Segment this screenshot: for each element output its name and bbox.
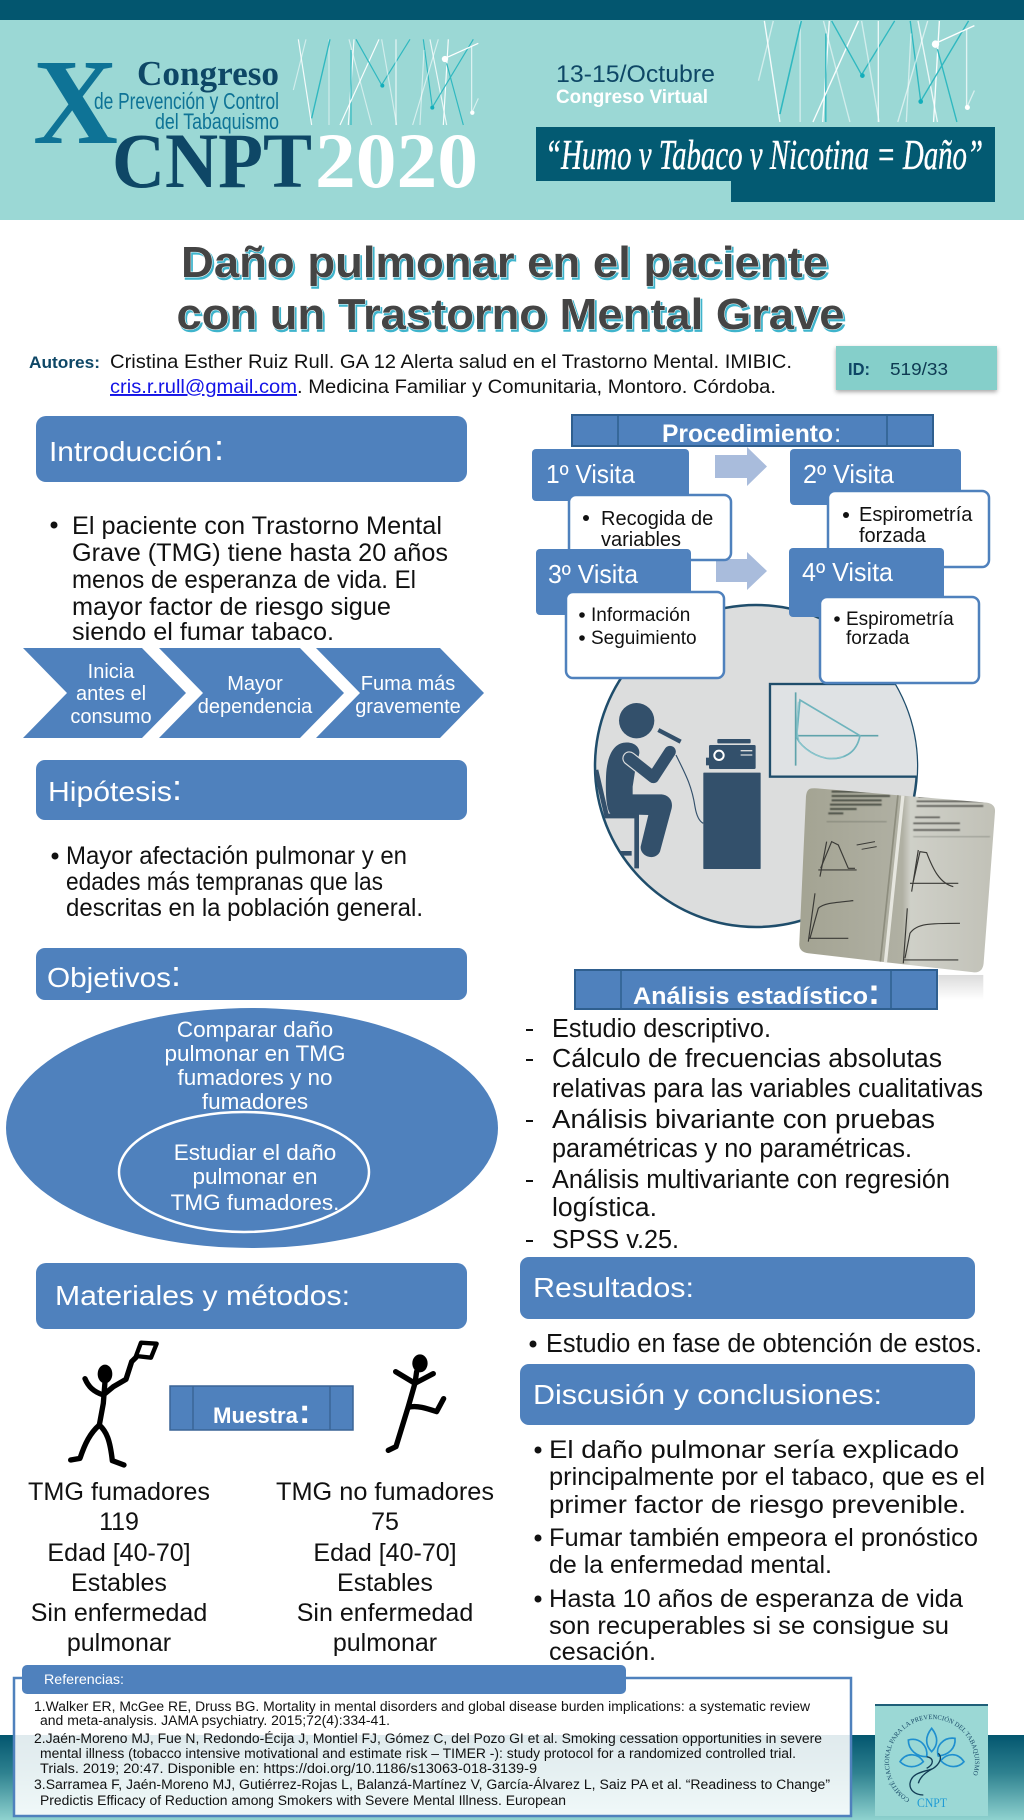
smokers group text: Estables bbox=[71, 1569, 167, 1597]
step: 3º visita: 3º Visita bbox=[548, 559, 639, 589]
ID tag: 519/33 bbox=[890, 359, 948, 379]
step: 1º visita: Recogida de bbox=[601, 508, 713, 530]
smokers group text: 119 bbox=[99, 1508, 139, 1536]
panel: objetivos bbox=[6, 948, 498, 1248]
chevron process bbox=[23, 648, 484, 738]
chevron: mayor dependencia: Mayor bbox=[227, 673, 283, 695]
non smokers group text: pulmonar bbox=[333, 1629, 437, 1657]
panel: muestra: Muestra bbox=[213, 1403, 299, 1428]
references text: 1.Walker ER, McGee RE, Druss BG. Mortality in mental disorders and global disease burden implications: a systematic review bbox=[34, 1699, 810, 1714]
conclusions list: Fumar también empeora el pronóstico bbox=[549, 1524, 978, 1552]
panel: análisis estadístico header bbox=[575, 970, 937, 1012]
chevron: inicia antes bbox=[23, 648, 186, 738]
objectives ellipses: fumadores bbox=[202, 1089, 308, 1114]
icon: stick figure smoker bbox=[71, 1343, 157, 1465]
panel: resultados bbox=[520, 1257, 982, 1358]
panel: materiales y métodos bbox=[36, 1263, 467, 1329]
title: con un Trastorno Mental Grave bbox=[178, 292, 846, 341]
introduction text: siendo el fumar tabaco. bbox=[72, 618, 334, 646]
logo: CNPT committee: CNPT bbox=[917, 1795, 947, 1810]
panel: discusión y conclusiones: Discusión y conclusiones: bbox=[533, 1379, 882, 1410]
logo X Congreso CNPT 2020 bbox=[33, 35, 478, 204]
step: 3º visita: Seguimiento bbox=[591, 628, 697, 649]
panel: referencias bbox=[14, 1665, 851, 1816]
statistical analysis list bbox=[526, 1015, 983, 1254]
introduction text: Grave (TMG) tiene hasta 20 años bbox=[72, 539, 448, 567]
non smokers group text bbox=[276, 1478, 494, 1657]
panel: materiales y métodos: Materiales y métodos: bbox=[55, 1280, 350, 1311]
step: 3º visita: Información bbox=[591, 605, 690, 626]
panel: procedimiento header: Procedimiento bbox=[662, 420, 833, 448]
logo: CNPT committee: COMITÉ NACIONAL PARA LA PREVENCIÓN DEL TABAQUISMO bbox=[884, 1714, 980, 1802]
statistical analysis list: Análisis bivariante con pruebas bbox=[552, 1106, 935, 1134]
conclusions list: principalmente por el tabaco, que es el bbox=[549, 1463, 985, 1491]
icon: flower bbox=[900, 1728, 964, 1795]
smokers group text bbox=[28, 1478, 210, 1657]
logo X Congreso CNPT 2020: de Prevención y Control bbox=[94, 88, 279, 114]
panel: introducción bbox=[36, 416, 467, 646]
title: Daño pulmonar en el paciente bbox=[182, 240, 830, 289]
ID tag: ID: bbox=[848, 359, 870, 379]
logo X Congreso CNPT 2020: X bbox=[33, 35, 118, 170]
statistical analysis list: SPSS v.25. bbox=[552, 1226, 679, 1254]
step: 4º visita: Espirometría bbox=[846, 609, 954, 630]
panel: introducción: Introducción bbox=[49, 436, 212, 467]
congress dates bbox=[556, 61, 715, 108]
authors: Autores: bbox=[29, 354, 100, 372]
panel: referencias: Referencias: bbox=[44, 1671, 124, 1687]
authors: . Medicina Familiar y Comunitaria, Montoro. Córdoba. bbox=[297, 376, 776, 398]
step: 1º visita bbox=[532, 449, 731, 560]
conclusions list: El daño pulmonar sería explicado bbox=[549, 1436, 959, 1464]
objectives ellipses bbox=[6, 1008, 498, 1248]
conclusions list: son recuperables si se consigue su bbox=[549, 1612, 949, 1640]
congress dates: 13-15/Octubre bbox=[556, 61, 715, 88]
step: 2º visita: Espirometría bbox=[859, 504, 973, 526]
spirometry illustration circle bbox=[595, 605, 927, 927]
authors: cris.r.rull@gmail.com bbox=[110, 376, 297, 398]
smokers group text: TMG fumadores bbox=[28, 1478, 210, 1506]
authors bbox=[29, 351, 792, 398]
statistical analysis list: Cálculo de frecuencias absolutas bbox=[552, 1045, 942, 1073]
references text: 3.Sarramea F, Jaén-Moreno MJ, Gutiérrez-Rojas L, Balanzá-Martínez V, García-Álvarez L, Saiz PA et al. “Readiness to Change” bbox=[34, 1777, 830, 1792]
step: 1º visita: variables bbox=[601, 529, 681, 551]
smokers group text: Edad [40-70] bbox=[47, 1539, 191, 1567]
panel: objetivos: Objetivos bbox=[47, 962, 171, 993]
step: 4º visita bbox=[789, 548, 979, 683]
authors: Cristina Esther Ruiz Rull. GA 12 Alerta salud en el Trastorno Mental. IMIBIC. bbox=[110, 351, 792, 373]
title: Daño pulmonar en el paciente bbox=[181, 238, 828, 287]
congress dates: Congreso Virtual bbox=[556, 87, 708, 108]
references text: 2.Jaén-Moreno MJ, Fue N, Redondo-Écija J, Montiel FJ, Gómez C, del Pozo GI et al. Smoking cessation opportunities in severe bbox=[34, 1731, 822, 1746]
smokers group text: Sin enfermedad bbox=[31, 1599, 207, 1627]
hypothesis text bbox=[52, 842, 423, 922]
conclusions list: cesación. bbox=[549, 1638, 656, 1666]
photo: spirometry printout bbox=[797, 787, 1000, 1000]
line art decorations bbox=[293, 21, 974, 125]
statistical analysis list: paramétricas y no paramétricas. bbox=[552, 1135, 912, 1163]
panel: muestra: : bbox=[299, 1393, 310, 1431]
references text: and meta-analysis. JAMA psychiatry. 2015;72(4):334-41. bbox=[40, 1713, 390, 1728]
statistical analysis list: logística. bbox=[552, 1194, 657, 1222]
non smokers group text: 75 bbox=[371, 1508, 399, 1536]
objectives ellipses: pulmonar en bbox=[192, 1164, 318, 1189]
conclusions list: Hasta 10 años de esperanza de vida bbox=[549, 1585, 963, 1613]
step: 2º visita bbox=[790, 449, 989, 567]
conclusions list: primer factor de riesgo prevenible. bbox=[549, 1491, 966, 1519]
header banner bbox=[0, 0, 1024, 220]
chevron: fuma más: Fuma más bbox=[361, 673, 455, 695]
panel: hipótesis: : bbox=[172, 767, 182, 808]
step: 3º visita bbox=[536, 549, 724, 678]
icon: spirometer machine bbox=[703, 739, 761, 869]
panel: objetivos: : bbox=[171, 953, 181, 994]
arrow: visita 3 to 4 bbox=[716, 552, 767, 590]
logo X Congreso CNPT 2020: Congreso bbox=[137, 54, 279, 93]
panel: análisis estadístico header: Análisis estadístico bbox=[633, 983, 868, 1010]
objectives ellipses: fumadores y no bbox=[177, 1065, 333, 1090]
references text: Trials. 2019; 20:47. Disponible en: https://doi.org/10.1186/s13063-018-3139-9 bbox=[40, 1761, 537, 1776]
slogan banner bbox=[536, 127, 995, 202]
non smokers group text: Sin enfermedad bbox=[297, 1599, 473, 1627]
ID tag bbox=[836, 346, 997, 390]
chevron: fuma más bbox=[316, 648, 484, 738]
introduction text: menos de esperanza de vida. El bbox=[72, 566, 416, 594]
introduction text: El paciente con Trastorno Mental bbox=[72, 512, 442, 540]
statistical analysis list: Estudio descriptivo. bbox=[552, 1015, 771, 1043]
hypothesis text: Mayor afectación pulmonar y en bbox=[66, 842, 407, 870]
panel: discusión y conclusiones bbox=[520, 1364, 985, 1666]
references text: mental illness (tobacco intensive motivational and estimate risk – TIMER -): study protocol for a randomized controlled trial. bbox=[40, 1746, 796, 1761]
logo X Congreso CNPT 2020: CNPT bbox=[112, 117, 312, 204]
title: con un Trastorno Mental Grave bbox=[176, 290, 844, 339]
arrow: visita 1 to 2 bbox=[715, 447, 767, 486]
panel: muestra bbox=[170, 1386, 353, 1431]
chevron: inicia antes: consumo bbox=[70, 706, 152, 728]
chevron: mayor dependencia bbox=[159, 648, 344, 738]
hypothesis text: descritas en la población general. bbox=[66, 894, 423, 922]
logo X Congreso CNPT 2020: 2020 bbox=[315, 117, 478, 204]
chevron: mayor dependencia: dependencia bbox=[198, 696, 313, 718]
logo X Congreso CNPT 2020: del Tabaquismo bbox=[155, 109, 279, 134]
statistical analysis list: relativas para las variables cualitativas bbox=[552, 1075, 983, 1103]
title bbox=[176, 238, 846, 341]
non smokers group text: TMG no fumadores bbox=[276, 1478, 494, 1506]
panel: procedimiento header: : bbox=[834, 418, 841, 448]
non smokers group text: Edad [40-70] bbox=[313, 1539, 457, 1567]
panel: resultados: Resultados: bbox=[533, 1272, 694, 1303]
statistical analysis list: Análisis multivariante con regresión bbox=[552, 1166, 950, 1194]
step: 2º visita: 2º Visita bbox=[803, 459, 895, 489]
chart: flow volume loop bbox=[770, 684, 927, 777]
panel: hipótesis bbox=[36, 760, 467, 922]
step: 4º visita: forzada bbox=[846, 628, 910, 649]
step: 1º visita: 1º Visita bbox=[546, 459, 636, 489]
smokers group text: pulmonar bbox=[67, 1629, 171, 1657]
step: 2º visita: forzada bbox=[859, 525, 927, 547]
icon: stick figure non smoker bbox=[388, 1354, 444, 1450]
chevron: fuma más: gravemente bbox=[355, 696, 461, 718]
results text: Estudio en fase de obtención de estos. bbox=[546, 1330, 982, 1358]
conclusions list bbox=[534, 1436, 985, 1666]
panel: procedimiento header bbox=[572, 415, 933, 448]
non smokers group text: Estables bbox=[337, 1569, 433, 1597]
panel: análisis estadístico header: : bbox=[868, 971, 880, 1012]
references text bbox=[34, 1699, 830, 1808]
step: 4º visita: 4º Visita bbox=[802, 557, 894, 587]
objectives ellipses: Estudiar el daño bbox=[174, 1140, 336, 1165]
hypothesis text: edades más tempranas que las bbox=[66, 868, 383, 896]
chevron: inicia antes: Inicia bbox=[88, 661, 135, 683]
panel: introducción: : bbox=[214, 427, 224, 468]
chevron: inicia antes: antes el bbox=[76, 683, 146, 705]
icon: patient using spirometer bbox=[596, 703, 761, 869]
panel: hipótesis: Hipótesis bbox=[48, 776, 172, 807]
objectives ellipses: TMG fumadores. bbox=[171, 1190, 339, 1215]
introduction text bbox=[50, 512, 448, 646]
references text: Predictis Efficacy of Reduction among Smokers with Severe Mental Illness. European bbox=[40, 1793, 566, 1808]
logo: CNPT committee bbox=[875, 1704, 988, 1816]
objectives ellipses: Comparar daño bbox=[177, 1017, 333, 1042]
objectives ellipses: pulmonar en TMG bbox=[165, 1041, 345, 1066]
conclusions list: de la enfermedad mental. bbox=[549, 1551, 832, 1579]
introduction text: mayor factor de riesgo sigue bbox=[72, 593, 391, 621]
footer gradient band bbox=[0, 1735, 1024, 1820]
